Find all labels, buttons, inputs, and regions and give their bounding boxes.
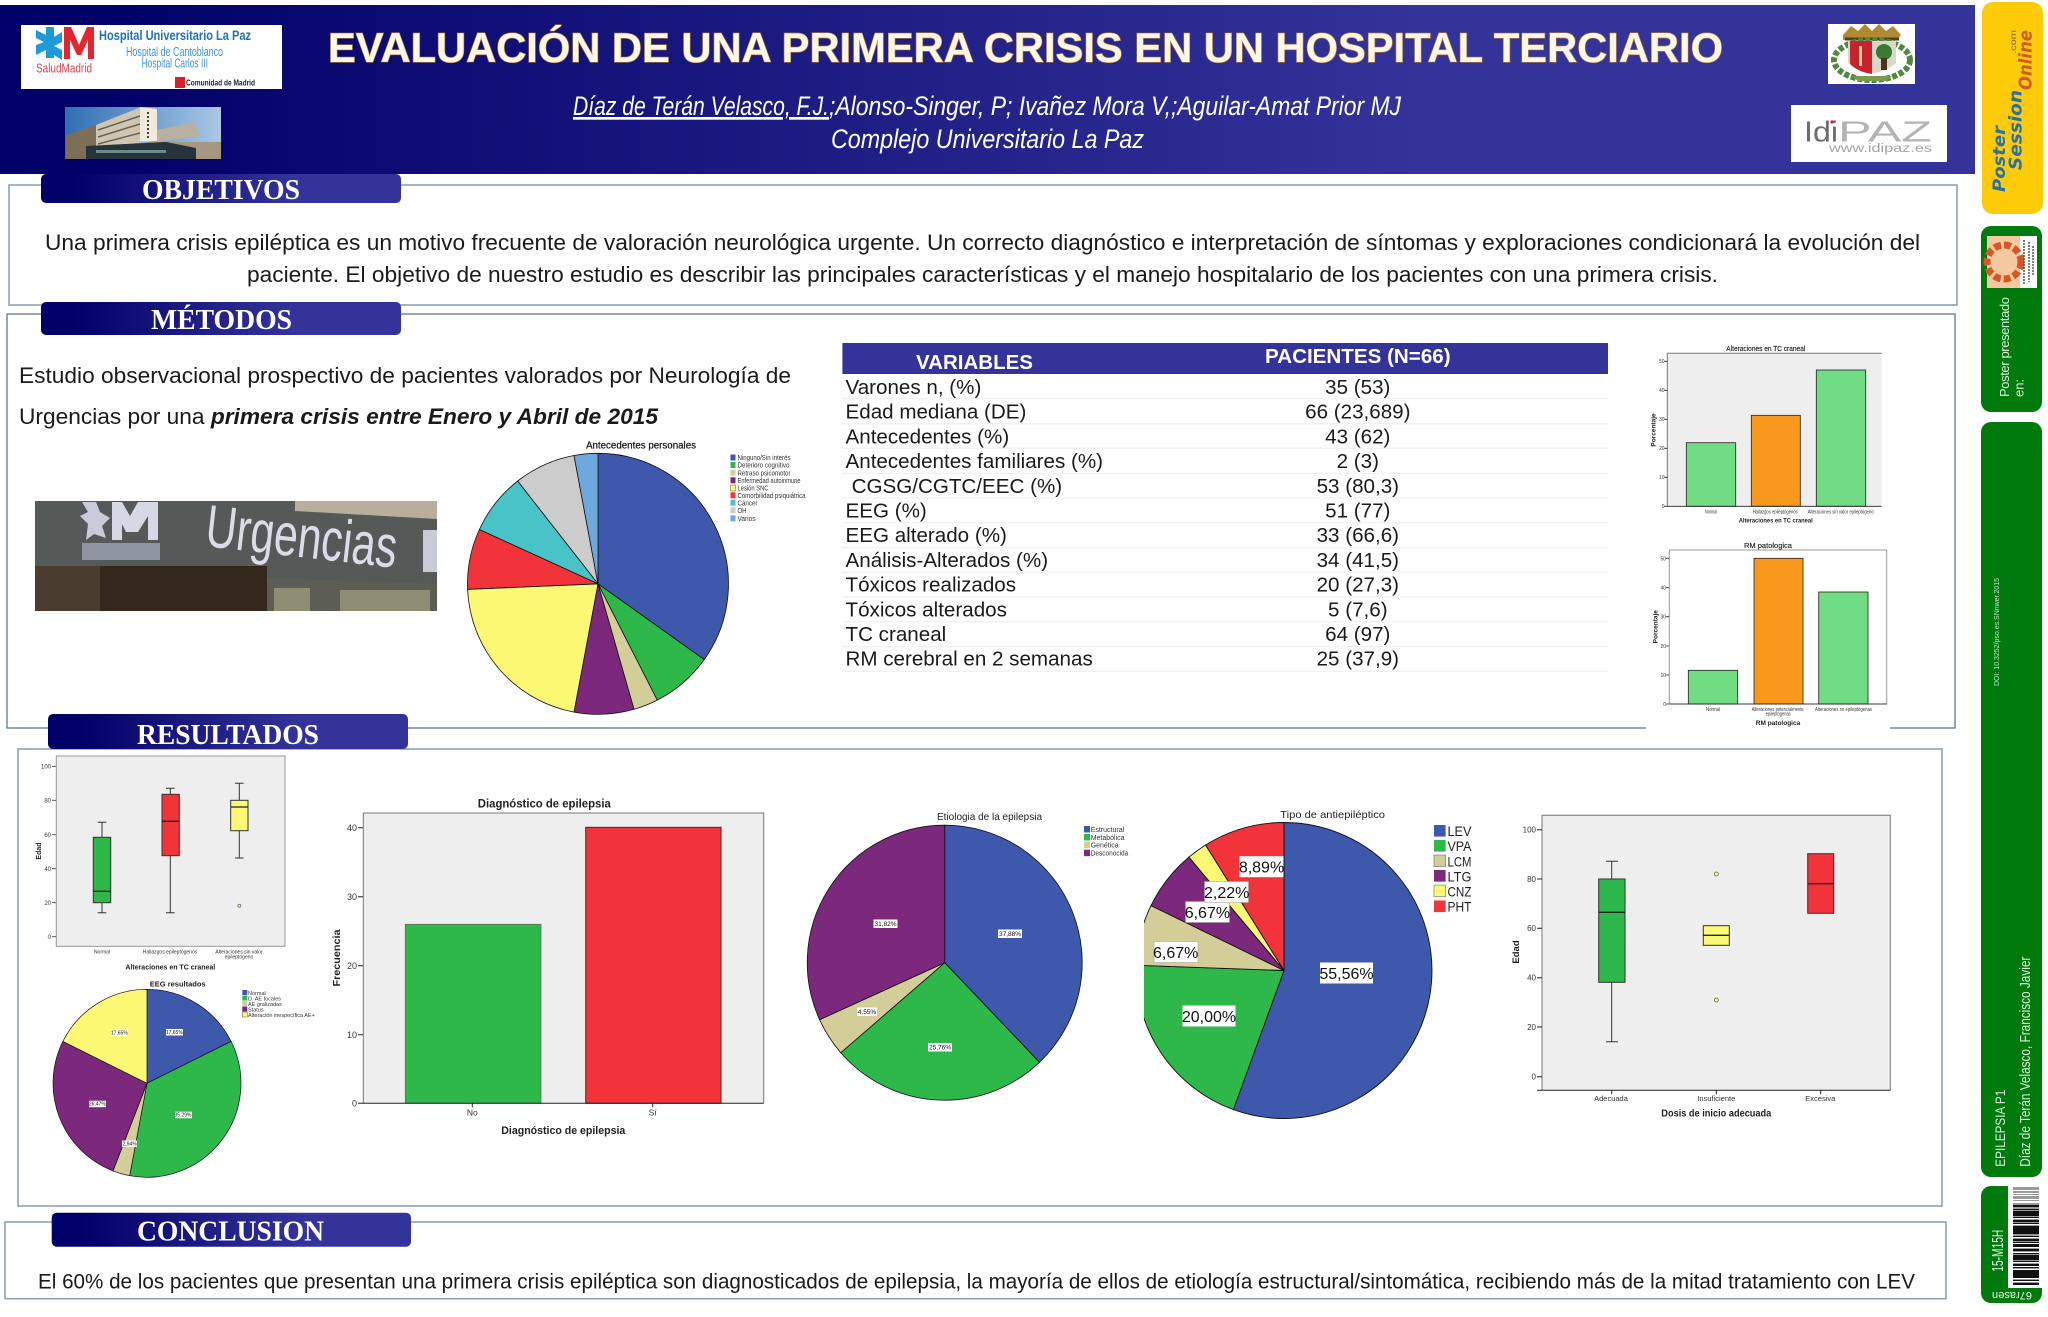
panel: objetivos <box>9 174 1957 305</box>
logo: Hospital Universitario La Paz: Hospital Carlos III <box>142 57 208 71</box>
data labels: antiepiléptico: 55,56% <box>1319 966 1374 983</box>
legend: EEG: Normal <box>248 991 266 997</box>
authors: Díaz de Terán Velasco, F.J. <box>573 91 829 121</box>
chart: RM patológica bar: Porcentaje <box>1652 610 1660 643</box>
legend: antiepiléptico <box>1434 823 1472 915</box>
chart: RM patológica bar: epileptógenas <box>1766 712 1791 718</box>
data labels: antiepiléptico: 6,67% <box>1153 945 1198 962</box>
chart: diagnóstico de epilepsia bar: 30 <box>347 892 357 902</box>
chart: edad por alteraciones TC boxplot: epileptógeno <box>225 954 254 960</box>
table rows: variables <box>846 376 1103 671</box>
text: poster presentado en: Poster presentado <box>1997 297 2012 397</box>
legend: EEG: Status <box>248 1008 264 1014</box>
legend: antecedentes: Varios <box>738 514 756 523</box>
table rows: pacientes: 53 (80,3) <box>1317 475 1399 498</box>
chart: tipo de antiepiléptico pie <box>1136 809 1472 1118</box>
text: objetivos: Una primera crisis epiléptica es un motivo frecuente de valoración neurológica urgente. Un correcto diagnóstico e interpretación de síntomas y exploraciones condicionará la evolución del <box>45 230 1920 255</box>
table rows: variables: CGSG/CGTC/EEC (%) <box>852 475 1062 498</box>
table rows: variables: Edad mediana (DE) <box>846 401 1026 424</box>
chart: tipo de antiepiléptico pie: Tipo de antiepiléptico <box>1280 809 1385 821</box>
legend: EEG <box>242 990 315 1019</box>
side strip: barcode: 67rasen <box>1992 1289 2032 1301</box>
text: métodos: Urgencias por una primera crisis entre Enero y Abril de 2015 <box>19 404 659 429</box>
legend: antiepiléptico: CNZ <box>1448 883 1472 899</box>
chart: diagnóstico de epilepsia bar: 10 <box>347 1030 357 1040</box>
chart: alteraciones en TC craneal bar: 30 <box>1659 417 1665 423</box>
legend: antecedentes: Ninguno/Sin interés <box>738 453 791 462</box>
text: métodos <box>19 363 791 429</box>
legend: antecedentes <box>730 453 806 523</box>
heading: métodos: MÉTODOS <box>151 303 292 336</box>
legend: antecedentes: Retraso psicomotor <box>738 468 791 477</box>
side strip: PosterSessionOnline <box>1982 2 2043 214</box>
chart: edad por dosis de inicio boxplot: 60 <box>1527 924 1537 933</box>
chart: RM patológica bar: 20 <box>1660 644 1666 650</box>
heading: objetivos: OBJETIVOS <box>142 174 300 206</box>
chart: RM patológica bar: 0 <box>1663 702 1666 708</box>
data labels: etiología: 4,55% <box>858 1009 876 1016</box>
photo: urgencias: Urgencias <box>203 492 401 581</box>
side strip: PosterSessionOnline: Session <box>2006 90 2026 170</box>
table: variables y pacientes <box>842 343 1608 671</box>
heading: conclusion: CONCLUSION <box>137 1216 324 1248</box>
table rows: pacientes <box>1305 376 1410 671</box>
text: poster presentado en <box>1997 297 2026 397</box>
data labels: antiepiléptico: 6,67% <box>1185 905 1230 922</box>
chart: diagnóstico de epilepsia bar: Diagnóstico de epilepsia <box>501 1125 626 1137</box>
chart: RM patológica bar: 50 <box>1660 556 1666 562</box>
legend: antiepiléptico: LCM <box>1448 853 1472 869</box>
table rows: variables: RM cerebral en 2 semanas <box>846 648 1093 671</box>
chart: alteraciones en TC craneal bar <box>1650 344 1882 525</box>
heading: objetivos <box>41 174 401 206</box>
chart: diagnóstico de epilepsia bar: Sí <box>649 1108 657 1118</box>
text: objetivos <box>45 230 1920 287</box>
chart: alteraciones en TC craneal bar: 50 <box>1659 359 1665 365</box>
chart: diagnóstico de epilepsia bar: No <box>467 1108 478 1118</box>
data labels: etiología: 37,88% <box>999 931 1021 938</box>
legend: antecedentes: Deterioro cognitivo <box>738 461 790 470</box>
chart: alteraciones en TC craneal bar: Alteraciones en TC craneal <box>1739 518 1813 525</box>
data labels: antiepiléptico <box>1153 856 1374 1026</box>
table rows: variables: Antecedentes (%) <box>846 425 1009 448</box>
chart: alteraciones en TC craneal bar: Normal <box>1705 510 1717 516</box>
chart: edad por dosis de inicio boxplot: 0 <box>1532 1072 1537 1082</box>
chart: RM patológica bar: RM patologica <box>1756 720 1801 727</box>
text: métodos: Estudio observacional prospectivo de pacientes valorados por Neurología de <box>19 363 791 388</box>
table rows: variables: Varones n, (%) <box>846 376 981 399</box>
table rows: pacientes: 2 (3) <box>1337 450 1379 473</box>
chart: diagnóstico de epilepsia bar: Diagnóstico de epilepsia <box>478 799 611 811</box>
legend: etiología: Estructural <box>1091 827 1125 834</box>
logo: IdiPAZ: PAZ <box>1838 117 1932 149</box>
logo: IdiPAZ: Idi <box>1804 117 1838 149</box>
table rows: pacientes: 51 (77) <box>1325 500 1390 522</box>
data labels: antiepiléptico: 2,22% <box>1204 885 1249 902</box>
chart: edad por alteraciones TC boxplot: 100 <box>41 764 52 770</box>
legend: antecedentes: Cáncer <box>738 498 758 507</box>
chart: alteraciones en TC craneal bar: Hallazgos epileptógenos <box>1753 510 1798 516</box>
chart: RM patológica bar: 30 <box>1660 615 1666 621</box>
chart: alteraciones en TC craneal bar: 10 <box>1659 475 1665 481</box>
chart: edad por alteraciones TC boxplot: Edad <box>36 842 43 860</box>
data labels: EEG: 2,94% <box>123 1142 137 1148</box>
chart: diagnóstico de epilepsia bar: 0 <box>352 1098 357 1108</box>
chart: edad por dosis de inicio boxplot: Excesiva <box>1805 1094 1836 1103</box>
legend: antiepiléptico: LEV <box>1448 823 1472 839</box>
legend: etiología <box>1084 826 1128 858</box>
panel: conclusion <box>5 1213 1946 1299</box>
data labels: antiepiléptico: 8,89% <box>1239 860 1284 877</box>
photo: hospital building <box>65 107 221 159</box>
table: variables y pacientes: VARIABLES <box>916 352 1033 374</box>
chart: diagnóstico de epilepsia bar: Frecuencia <box>331 929 343 986</box>
text: conclusion: El 60% de los pacientes que presentan una primera crisis epiléptica son diagnosticados de epilepsia, la mayoría de ellos de etiología estructural/sintomática, recibiendo más de la mitad tratamiento con LEV <box>38 1270 1915 1293</box>
table rows: pacientes: 5 (7,6) <box>1328 598 1388 621</box>
logo: Hospital Universitario La Paz <box>21 25 282 89</box>
chart: EEG resultados pie <box>53 980 315 1177</box>
chart: EEG resultados pie: EEG resultados <box>150 980 206 989</box>
chart: RM patológica bar: Alteraciones potencialmente <box>1752 707 1804 713</box>
legend: antecedentes: OH <box>738 506 746 515</box>
legend: antiepiléptico: PHT <box>1448 899 1472 915</box>
chart: edad por dosis de inicio boxplot: Dosis de inicio adecuada <box>1661 1109 1772 1120</box>
table: variables y pacientes: PACIENTES (N=66) <box>1265 346 1451 368</box>
table rows: variables: TC craneal <box>846 623 946 646</box>
side strip: barcode <box>1981 1186 2042 1303</box>
data labels: EEG: 26,47% <box>89 1102 106 1108</box>
logo: Hospital Universitario La Paz: SaludMadrid <box>36 61 92 76</box>
chart: alteraciones en TC craneal bar: Porcentaje <box>1650 413 1658 447</box>
chart: diagnóstico de epilepsia bar: 20 <box>347 961 357 971</box>
chart: edad por alteraciones TC boxplot: 80 <box>44 798 52 804</box>
legend: antecedentes: Comorbilidad psiquiátrica <box>738 491 806 500</box>
title: EVALUACIÓN DE UNA PRIMERA CRISIS EN UN HOSPITAL TERCIARIO <box>328 23 1723 71</box>
chart: edad por alteraciones TC boxplot <box>36 756 285 972</box>
heading: métodos <box>41 302 401 336</box>
data labels: EEG: 17,65% <box>111 1030 128 1036</box>
heading: resultados: RESULTADOS <box>137 719 319 751</box>
chart: RM patológica bar: 40 <box>1660 586 1666 592</box>
table rows: variables: Tóxicos alterados <box>846 598 1007 621</box>
legend: antecedentes: Lesión SNC <box>738 484 769 493</box>
legend: etiología: Metabólica <box>1091 835 1125 842</box>
chart: RM patológica bar: Normal <box>1706 707 1720 713</box>
side strip: barcode: 15-M15H <box>1990 1230 2007 1272</box>
legend: EEG: AE gralizadas <box>248 1002 282 1008</box>
logo: Hospital Universitario La Paz: Hospital de Cantoblanco <box>126 45 223 59</box>
heading: conclusion <box>52 1213 411 1248</box>
table rows: pacientes: 34 (41,5) <box>1317 549 1399 572</box>
data labels: antiepiléptico: 20,00% <box>1182 1009 1236 1026</box>
data labels: etiología: 31,82% <box>874 921 897 928</box>
side strip: session and author: Díaz de Terán Velasco, Francisco Javier <box>2018 957 2034 1167</box>
chart: alteraciones en TC craneal bar: Alteraciones en TC craneal <box>1726 344 1806 353</box>
chart: edad por alteraciones TC boxplot: Hallazgos epileptógenos <box>143 950 198 956</box>
logo: Hospital Universitario La Paz: Hospital Universitario La Paz <box>99 27 251 43</box>
chart: edad por dosis de inicio boxplot: 20 <box>1527 1023 1537 1032</box>
heading: resultados <box>48 714 408 751</box>
legend: etiología: Desconocida <box>1091 851 1128 858</box>
logo: IdiPAZ: www.idipaz.es <box>1828 143 1932 155</box>
chart: edad por alteraciones TC boxplot: 0 <box>48 935 52 941</box>
chart: edad por dosis de inicio boxplot: Insuficiente <box>1697 1094 1735 1103</box>
chart: alteraciones en TC craneal bar: 40 <box>1659 388 1665 394</box>
table rows: variables: Tóxicos realizados <box>846 574 1016 597</box>
side strip: PosterSessionOnline: Online <box>2016 30 2036 90</box>
table rows: pacientes: 35 (53) <box>1325 376 1390 399</box>
chart: RM patológica bar <box>1652 541 1887 727</box>
data labels: EEG: 17,65% <box>166 1030 183 1036</box>
legend: EEG: D. AE focales <box>248 996 281 1002</box>
chart: antecedentes personales pie <box>467 441 806 714</box>
table rows: pacientes: 20 (27,3) <box>1317 574 1399 597</box>
chart: diagnóstico de epilepsia bar: 40 <box>347 823 357 833</box>
text: objetivos: paciente. El objetivo de nuestro estudio es describir las principales características y el manejo hospitalario de los pacientes con una primera crisis. <box>247 262 1718 287</box>
chart: diagnóstico de epilepsia bar <box>331 799 764 1137</box>
chart: edad por dosis de inicio boxplot <box>1511 815 1890 1120</box>
table rows: variables: EEG alterado (%) <box>846 524 1007 547</box>
chart: edad por alteraciones TC boxplot: 60 <box>44 833 52 839</box>
chart: edad por alteraciones TC boxplot: 40 <box>44 867 52 873</box>
legend: EEG: Alteración inespecífica AE+ <box>248 1013 315 1019</box>
chart: edad por alteraciones TC boxplot: Normal <box>94 950 110 956</box>
chart: edad por dosis de inicio boxplot: 80 <box>1527 875 1537 884</box>
legend: antiepiléptico: LTG <box>1448 868 1472 884</box>
table rows: pacientes: 64 (97) <box>1325 623 1390 646</box>
legend: antiepiléptico: VPA <box>1448 838 1472 854</box>
chart: etiología de la epilepsia pie <box>807 812 1128 1100</box>
logo: IdiPAZ <box>1791 105 1947 162</box>
chart: RM patológica bar: Alteraciones no epileptógenas <box>1815 707 1872 713</box>
affiliation: Complejo Universitario La Paz <box>831 124 1144 154</box>
chart: RM patológica bar: RM patologica <box>1744 541 1793 550</box>
authors <box>573 91 1401 121</box>
chart: edad por alteraciones TC boxplot: Alteraciones en TC craneal <box>125 965 215 972</box>
icon: congress brain logo <box>1987 236 2037 288</box>
table rows: pacientes: 33 (66,6) <box>1317 524 1399 547</box>
chart: edad por dosis de inicio boxplot: Adecuada <box>1594 1094 1629 1103</box>
logo: crest <box>1828 24 1915 84</box>
chart: alteraciones en TC craneal bar: Alteraciones sin valor epileptógeno <box>1808 510 1874 516</box>
chart: etiología de la epilepsia pie: Etiologia de la epilepsia <box>937 812 1042 823</box>
data labels: EEG <box>89 1029 192 1148</box>
text: poster presentado en: en: <box>2012 379 2026 397</box>
legend: antecedentes: Enfermedad autoinmune <box>738 476 800 485</box>
side strip: session and author: DOI: 10.3252/pso.es.SNnwer.2015 <box>1994 578 2001 686</box>
side strip: poster presentado en <box>1981 226 2042 412</box>
chart: edad por dosis de inicio boxplot: Edad <box>1511 940 1522 964</box>
side strip: PosterSessionOnline: Poster <box>1990 124 2010 192</box>
authors: ;Alonso-Singer, P; Ivañez Mora V,;Aguilar-Amat Prior MJ <box>829 91 1401 121</box>
chart: RM patológica bar: 10 <box>1660 673 1666 679</box>
chart: edad por dosis de inicio boxplot: 100 <box>1523 826 1537 834</box>
chart: alteraciones en TC craneal bar: 0 <box>1662 504 1665 510</box>
table rows: pacientes: 43 (62) <box>1325 425 1390 448</box>
table rows: variables: Antecedentes familiares (%) <box>846 450 1103 473</box>
panel: métodos <box>7 302 1955 732</box>
legend: etiología: Genética <box>1091 843 1119 850</box>
chart: alteraciones en TC craneal bar: 20 <box>1659 446 1665 452</box>
logo: Hospital Universitario La Paz: Comunidad de Madrid <box>186 78 255 87</box>
chart: antecedentes personales pie: Antecedentes personales <box>586 441 696 452</box>
chart: edad por dosis de inicio boxplot: 40 <box>1527 974 1537 982</box>
panel: resultados <box>18 714 1942 1206</box>
chart: edad por alteraciones TC boxplot: Alteraciones sin valor <box>215 950 263 956</box>
side strip: session and author: EPILEPSIA P1 <box>1992 1090 2008 1167</box>
header banner <box>0 5 1975 174</box>
side strip: session and author <box>1981 422 2042 1177</box>
photo: urgencias <box>35 492 437 611</box>
chart: edad por alteraciones TC boxplot: 20 <box>44 901 52 907</box>
data labels: etiología: 25,76% <box>929 1044 951 1052</box>
side strip: PosterSessionOnline: .com <box>2009 30 2018 54</box>
table rows: variables: Análisis-Alterados (%) <box>846 549 1048 572</box>
table rows: pacientes: 25 (37,9) <box>1317 648 1399 671</box>
table rows: pacientes: 66 (23,689) <box>1305 401 1410 424</box>
data labels: EEG: 35,29% <box>175 1113 192 1119</box>
data labels: etiología <box>857 920 1022 1052</box>
table rows: variables: EEG (%) <box>846 500 927 522</box>
